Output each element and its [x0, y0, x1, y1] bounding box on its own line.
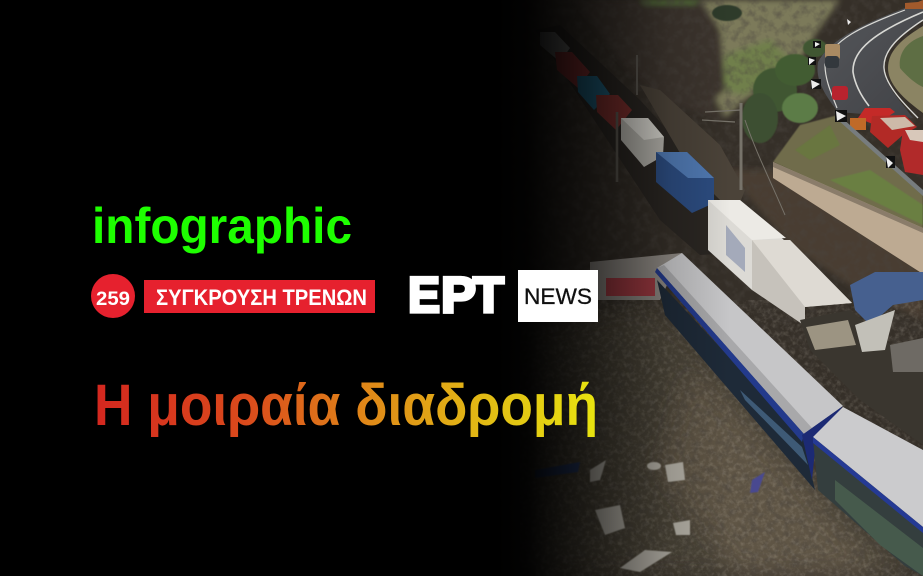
ground [480, 0, 923, 576]
ground texture [500, 0, 923, 576]
tag: train collision: ΣΥΓΚΡΟΥΣΗ ΤΡΕΝΩΝ [156, 285, 367, 310]
passenger coach 1 [655, 253, 843, 490]
logo: ERT: Τ [473, 267, 504, 323]
cars and fire engines [825, 0, 923, 175]
hillside field [575, 0, 840, 120]
logo: ERT: Ε [408, 267, 440, 323]
logo: NEWS box [518, 270, 598, 322]
container: blue [656, 152, 714, 213]
container: white [621, 118, 664, 167]
masts [617, 55, 785, 215]
photo: derailed trains at the crash site [480, 0, 923, 576]
litter [535, 460, 765, 572]
badge: episode number [91, 274, 135, 318]
slope above the wall [773, 115, 923, 232]
wreck debris [800, 272, 923, 445]
main title: Η μοιραία διαδρομή [94, 373, 598, 438]
logo: ERT [408, 267, 504, 323]
containers: long white [708, 200, 852, 326]
road markings [825, 10, 923, 118]
railway bed [535, 25, 780, 255]
passenger coach 2 [813, 407, 923, 576]
bushes [712, 5, 827, 143]
lower ground [520, 300, 923, 576]
guard rail [838, 118, 923, 196]
heading: infographic: infographic [92, 198, 352, 254]
logo: ERT: Ρ [441, 267, 476, 323]
graffiti container end [590, 253, 682, 300]
tag: train collision [144, 280, 375, 313]
badge: episode number: 259 [96, 289, 130, 310]
logo: NEWS box: NEWS [524, 284, 592, 309]
chevron signs [808, 19, 895, 168]
road [817, 6, 923, 118]
retaining wall [773, 162, 923, 274]
freight wagons: distant [540, 32, 632, 130]
coupling [802, 406, 843, 480]
